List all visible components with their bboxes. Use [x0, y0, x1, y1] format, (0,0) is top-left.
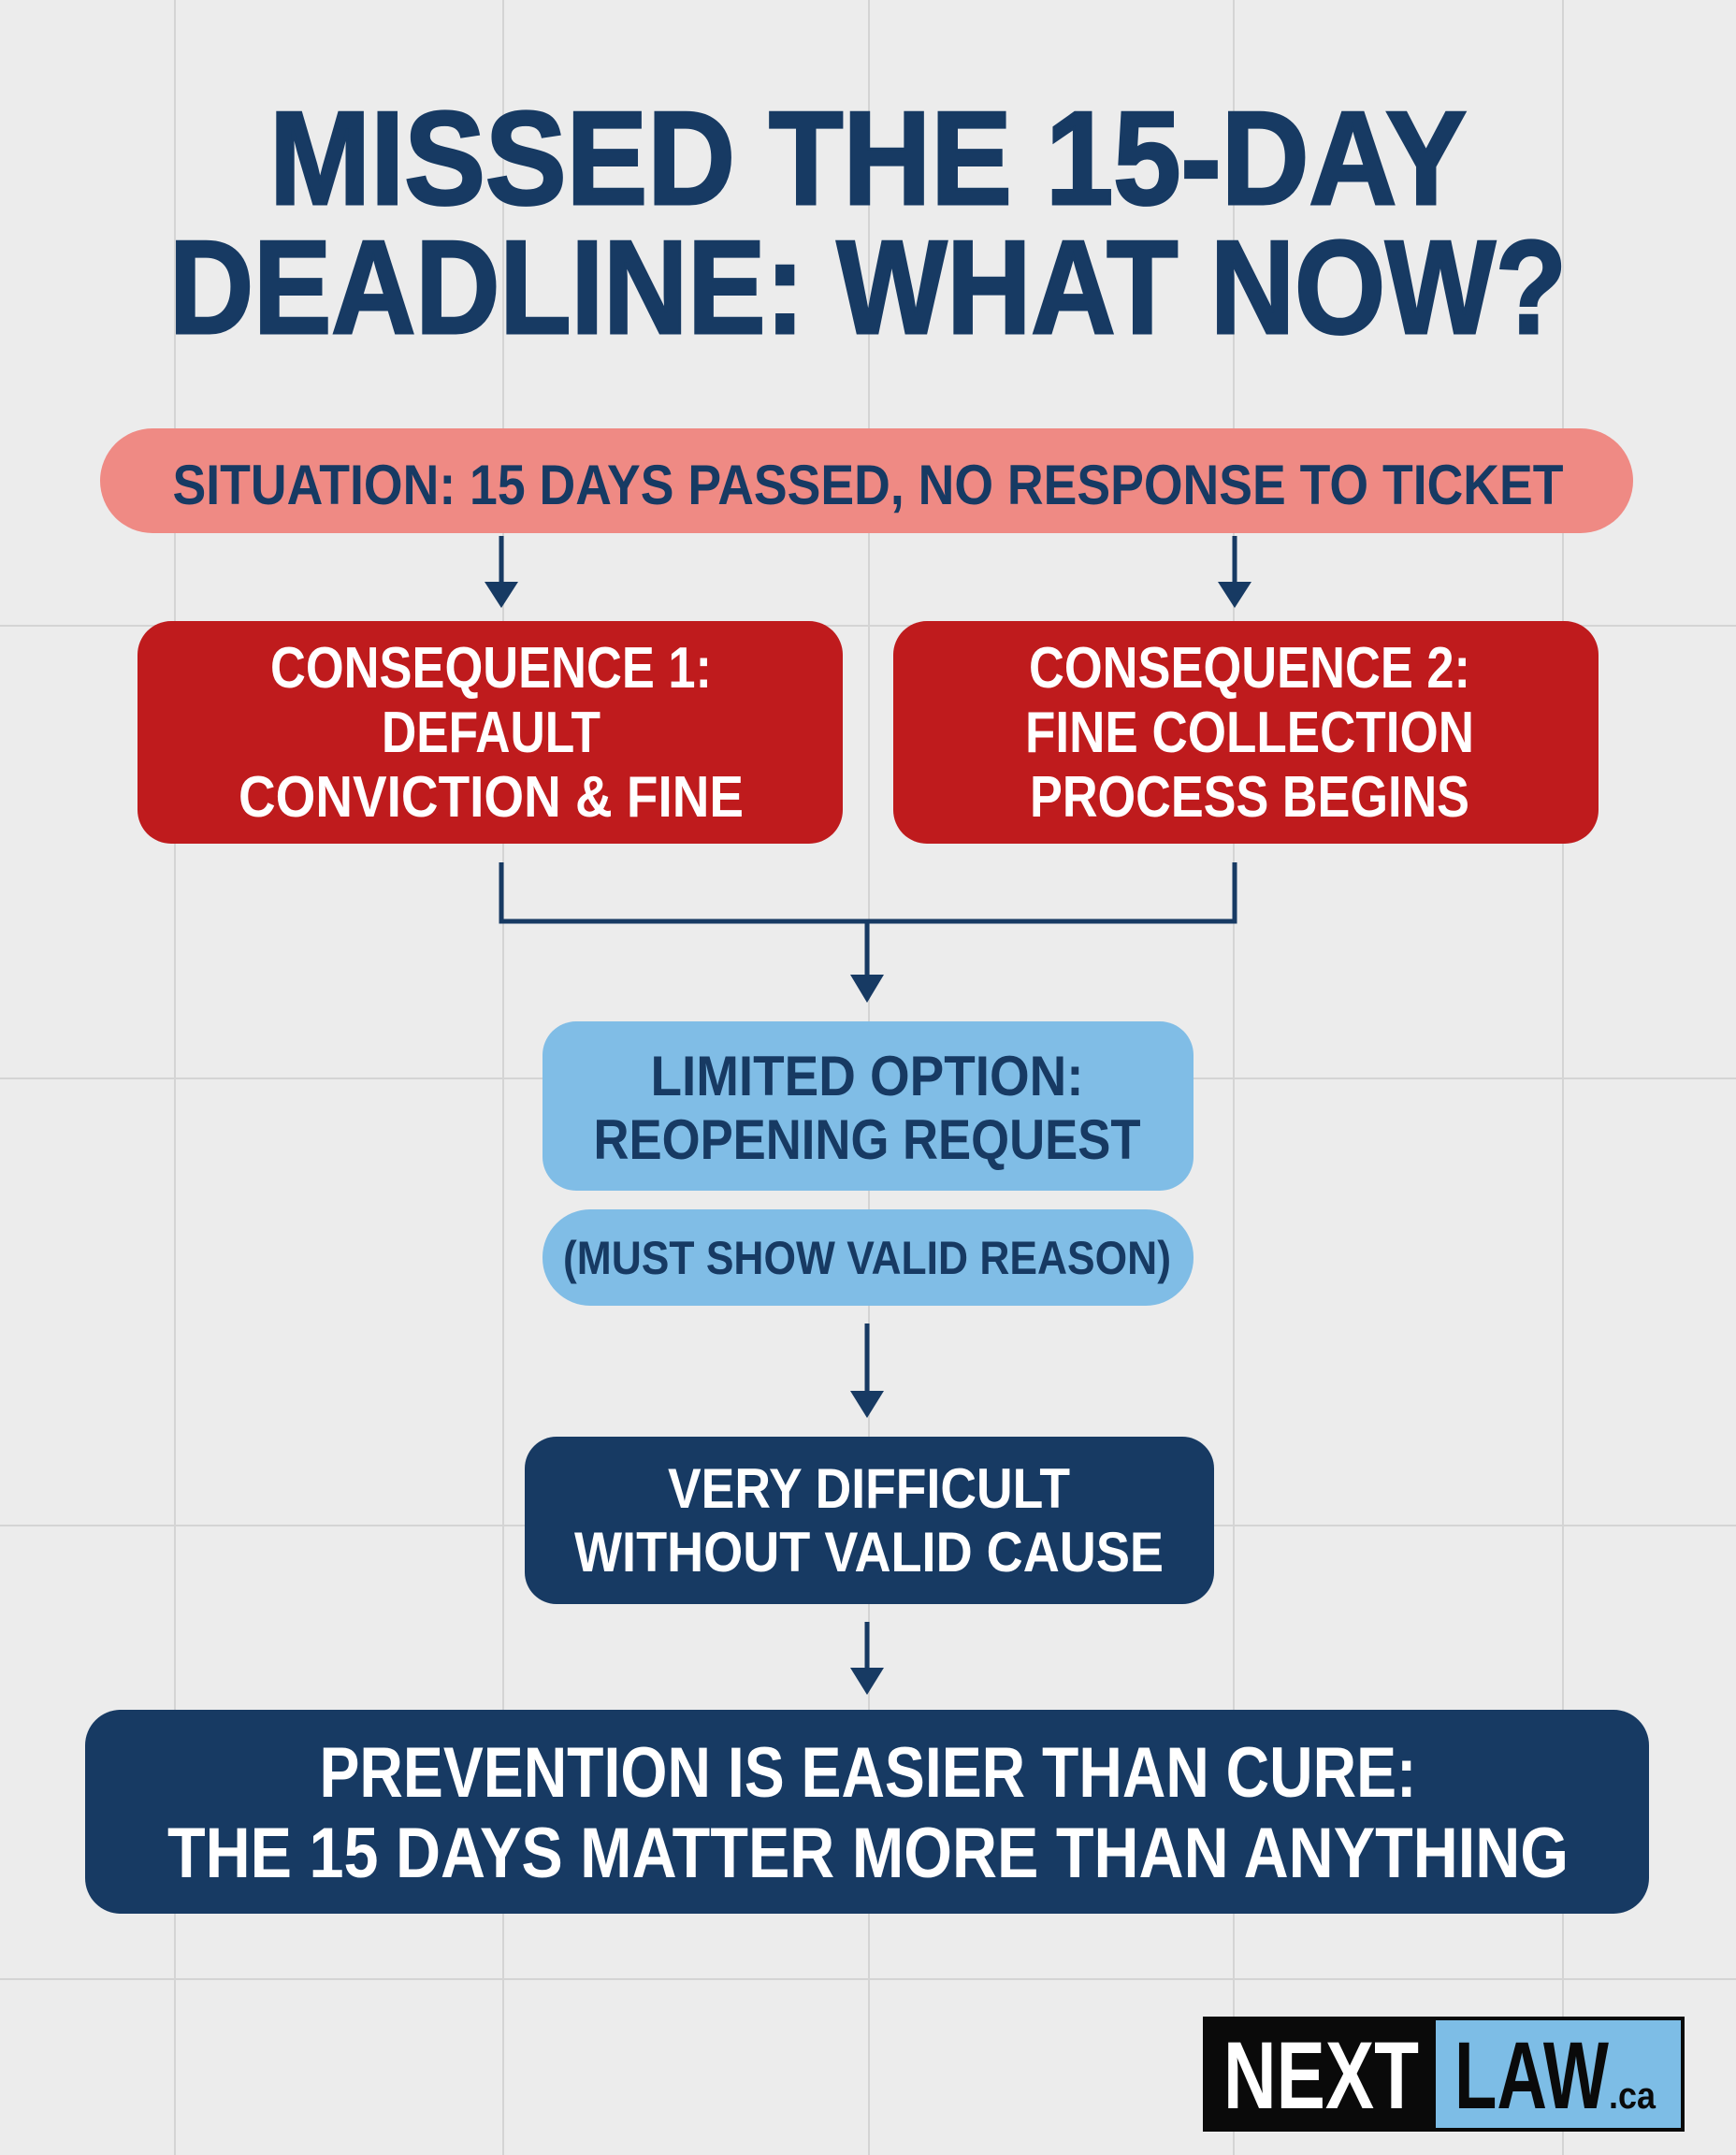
- title: DEADLINE: WHAT NOW?: [169, 213, 1567, 362]
- panel: consequence 1: CONVICTION & FINE: [239, 765, 744, 830]
- logo: NEXTLAW.ca: [1203, 2017, 1685, 2132]
- panel: situation: SITUATION: 15 DAYS PASSED, NO RESPONSE TO TICKET: [172, 454, 1564, 516]
- panel: situation: [100, 428, 1633, 533]
- panel: consequence 2: CONSEQUENCE 2:: [1029, 636, 1470, 701]
- panel: consequence 2: [893, 621, 1599, 844]
- panel: consequence 1: [137, 621, 843, 844]
- panel: very difficult: [525, 1437, 1214, 1604]
- panel: consequence 2: FINE COLLECTION: [1025, 701, 1474, 765]
- panel: consequence 2: PROCESS BEGINS: [1030, 765, 1469, 830]
- panel: prevention: [85, 1710, 1649, 1914]
- panel: consequence 1: CONSEQUENCE 1:: [270, 636, 712, 701]
- panel: consequence 1: DEFAULT: [382, 701, 600, 765]
- arrow: situation to consequence 1: [485, 536, 518, 608]
- panel: limited option: [542, 1021, 1194, 1191]
- arrow: to prevention: [850, 1622, 884, 1695]
- panel: very difficult: WITHOUT VALID CAUSE: [574, 1521, 1164, 1584]
- logo: NEXTLAW.ca: NEXT: [1223, 2022, 1419, 2129]
- title: [169, 84, 1567, 362]
- panel: prevention: THE 15 DAYS MATTER MORE THAN ANYTHING: [167, 1814, 1569, 1893]
- arrow: merge connector: [501, 862, 1235, 1003]
- panel: limited option: LIMITED OPTION:: [651, 1045, 1083, 1107]
- arrow: to very difficult: [850, 1323, 884, 1418]
- logo: NEXTLAW.ca: LAW: [1454, 2022, 1610, 2129]
- title: MISSED THE 15-DAY: [269, 84, 1467, 233]
- panel: must show valid reason: (MUST SHOW VALID REASON): [563, 1232, 1171, 1284]
- panel: limited option: REOPENING REQUEST: [593, 1108, 1141, 1171]
- panel: prevention: PREVENTION IS EASIER THAN CURE:: [320, 1733, 1416, 1813]
- panel: must show valid reason: [542, 1209, 1194, 1306]
- panel: very difficult: VERY DIFFICULT: [668, 1457, 1070, 1520]
- arrow: situation to consequence 2: [1218, 536, 1251, 608]
- logo: NEXTLAW.ca: .ca: [1609, 2075, 1656, 2117]
